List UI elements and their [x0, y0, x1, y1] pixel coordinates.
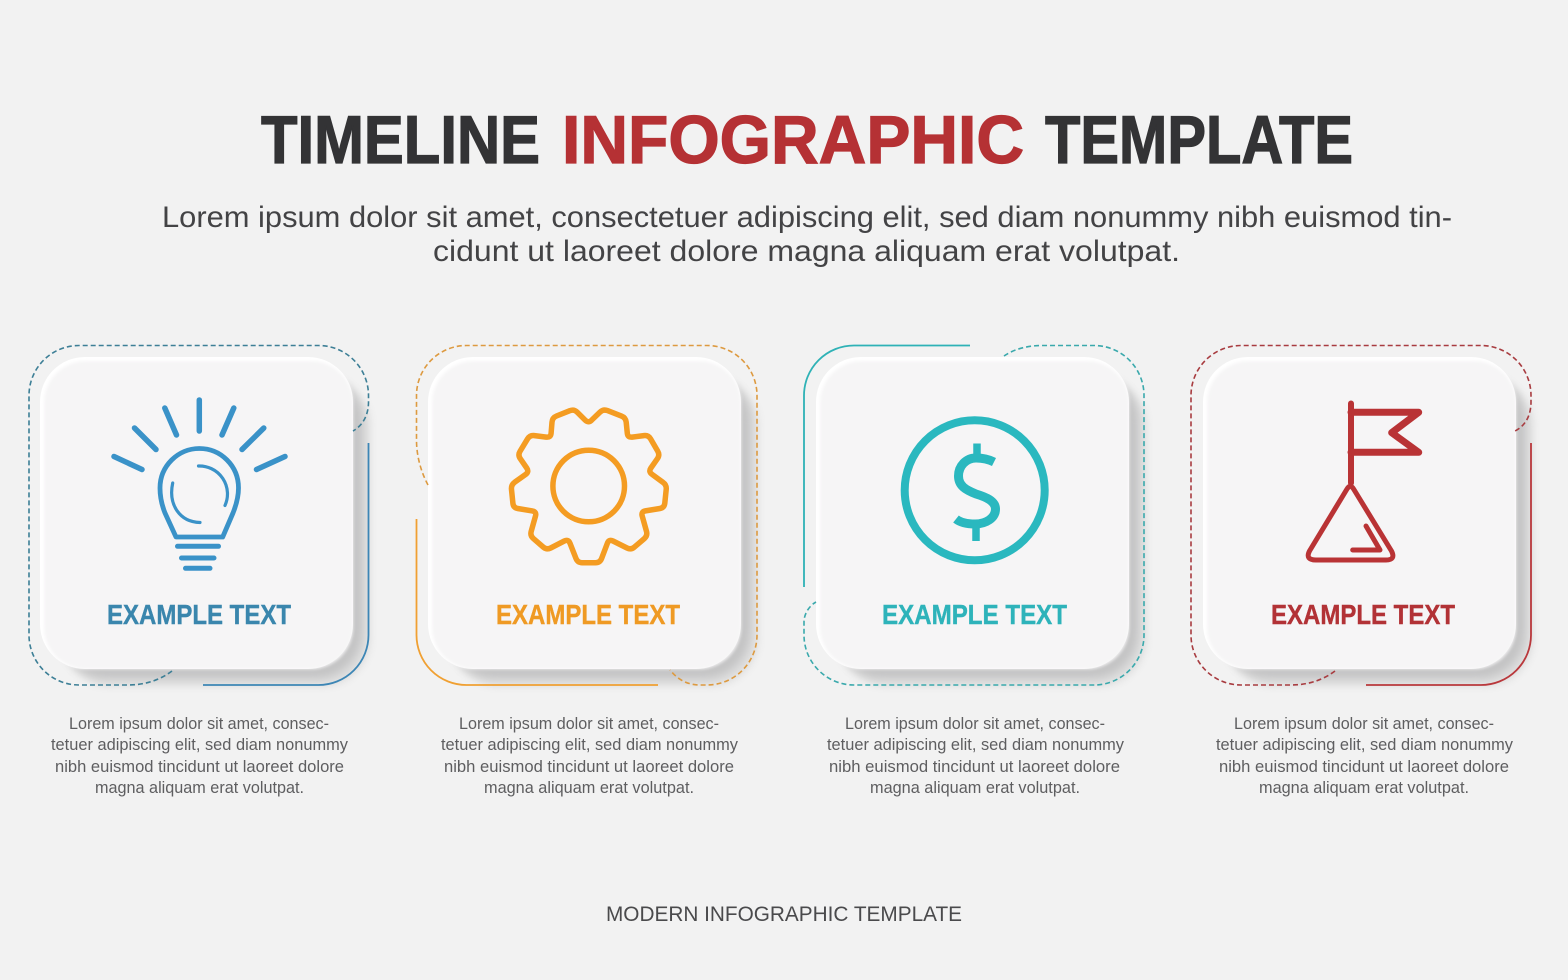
- description 1: Lorem ipsum dolor sit amet, consec-: [69, 714, 329, 733]
- description 4: [1216, 714, 1514, 797]
- card 2: [428, 357, 758, 686]
- label 4: EXAMPLE TEXT: [1271, 599, 1455, 630]
- description 3: magna aliquam erat volutpat.: [870, 778, 1080, 797]
- description 4: tetuer adipiscing elit, sed diam nonummy: [1216, 735, 1514, 754]
- description 1: magna aliquam erat volutpat.: [95, 778, 304, 797]
- title: TEMPLATE: [1045, 102, 1353, 178]
- description 1: [51, 714, 349, 797]
- description 3: tetuer adipiscing elit, sed diam nonummy: [827, 735, 1125, 754]
- icon: dollar coin: [905, 420, 1045, 560]
- panel: step 3 finance: [804, 346, 1146, 797]
- card 3: [816, 357, 1146, 686]
- description 4: magna aliquam erat volutpat.: [1259, 778, 1469, 797]
- label 3: EXAMPLE TEXT: [882, 599, 1067, 630]
- label 1: EXAMPLE TEXT: [107, 599, 291, 630]
- description 1: tetuer adipiscing elit, sed diam nonummy: [51, 735, 349, 754]
- description 2: [441, 714, 739, 797]
- subtitle: cidunt ut laoreet dolore magna aliquam erat volutpat.: [433, 235, 1180, 268]
- description 1: nibh euismod tincidunt ut laoreet dolore: [55, 757, 344, 776]
- description 2: tetuer adipiscing elit, sed diam nonummy: [441, 735, 739, 754]
- description 3: [827, 714, 1125, 797]
- label 2: EXAMPLE TEXT: [496, 599, 680, 630]
- subtitle: [162, 201, 1452, 268]
- description 2: magna aliquam erat volutpat.: [484, 778, 694, 797]
- panel: step 1 idea: [29, 346, 370, 797]
- outline 3: [804, 346, 1144, 685]
- title: TIMELINE: [261, 102, 540, 178]
- description 3: nibh euismod tincidunt ut laoreet dolore: [829, 757, 1120, 776]
- card 4: [1203, 357, 1533, 686]
- card 1: [40, 357, 370, 686]
- description 4: nibh euismod tincidunt ut laoreet dolore: [1219, 757, 1509, 776]
- icon: flag on mountain: [1308, 404, 1419, 560]
- title: [261, 102, 1353, 178]
- title: INFOGRAPHIC: [562, 102, 1024, 178]
- icon: gear: [511, 410, 666, 563]
- outline 2: [416, 346, 757, 685]
- footer caption: MODERN INFOGRAPHIC TEMPLATE: [606, 903, 962, 926]
- subtitle: Lorem ipsum dolor sit amet, consectetuer adipiscing elit, sed diam nonummy nibh euismod tin-: [162, 201, 1452, 234]
- icon: light bulb: [114, 400, 285, 568]
- description 4: Lorem ipsum dolor sit amet, consec-: [1234, 714, 1494, 733]
- description 2: Lorem ipsum dolor sit amet, consec-: [459, 714, 719, 733]
- outline 4: [1191, 346, 1531, 685]
- description 3: Lorem ipsum dolor sit amet, consec-: [845, 714, 1105, 733]
- description 2: nibh euismod tincidunt ut laoreet dolore: [444, 757, 734, 776]
- panel: step 4 goal: [1191, 346, 1533, 797]
- panel: step 2 settings: [416, 346, 758, 797]
- outline 1: [29, 346, 368, 685]
